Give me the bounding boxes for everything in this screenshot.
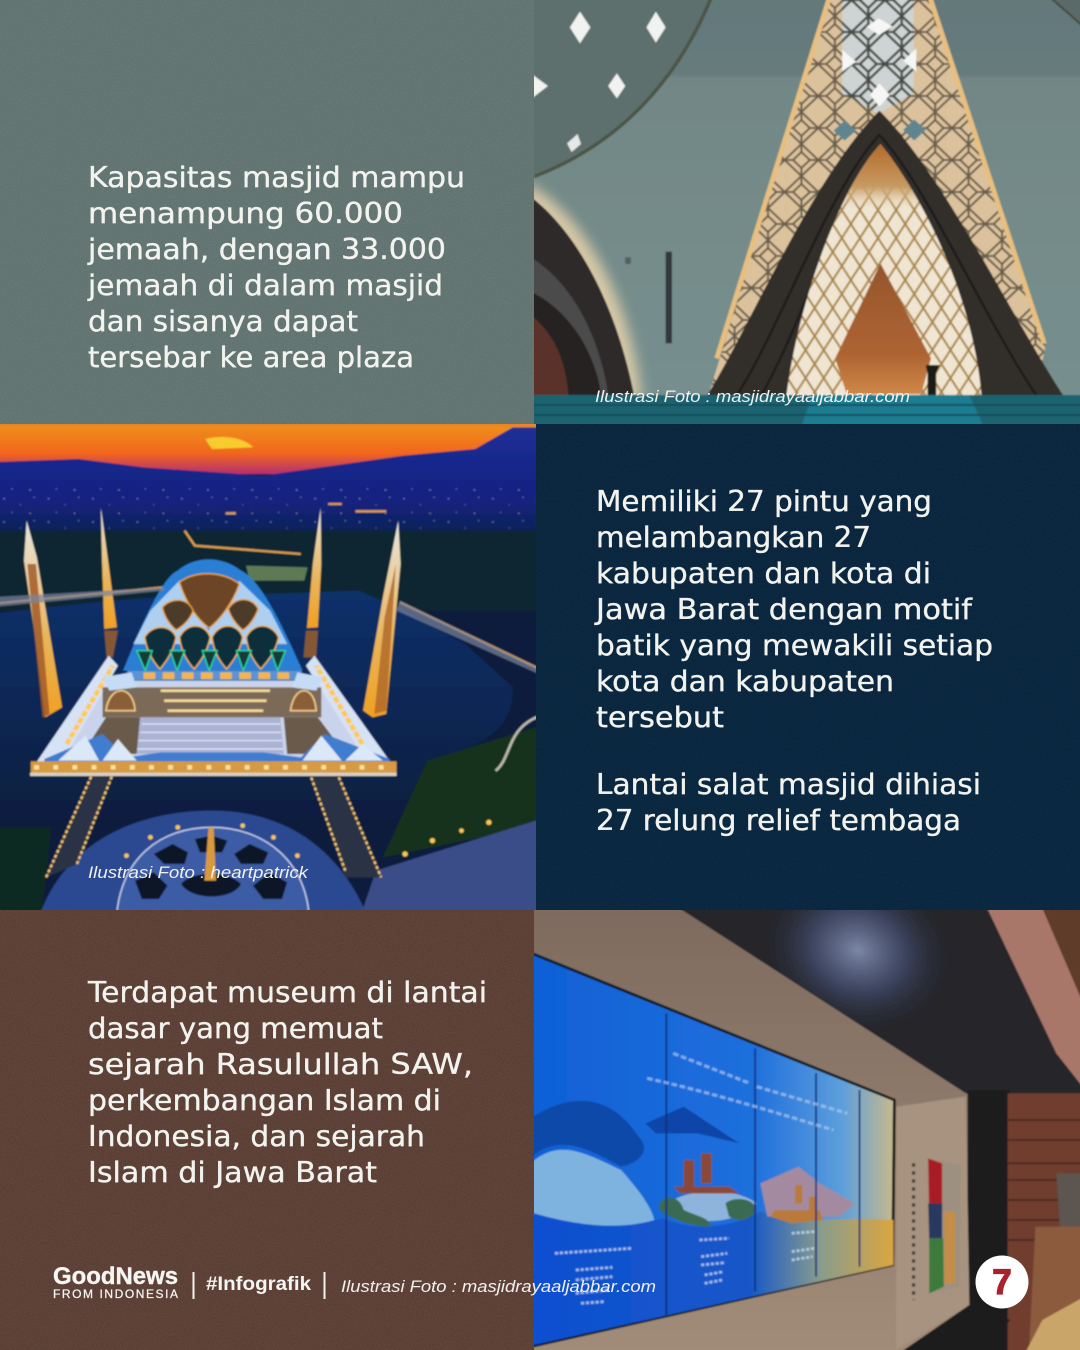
text: museum description: sejarah Rasulullah SAW, <box>88 1048 473 1081</box>
text: capacity of the mosque: tersebar ke area plaza <box>88 341 414 374</box>
page number badge: 7 <box>992 1263 1012 1302</box>
text: twenty-seven doors: Memiliki 27 pintu yang <box>596 485 932 518</box>
text: twenty-seven doors: 27 relung relief tembaga <box>596 804 961 837</box>
text: capacity of the mosque: Kapasitas masjid mampu <box>88 161 465 194</box>
text: capacity of the mosque: menampung 60.000 <box>88 197 403 230</box>
panel: museum text background <box>0 910 534 1350</box>
logo: GoodNews from Indonesia: GoodNews <box>53 1263 178 1290</box>
page number badge <box>976 1256 1028 1308</box>
text: twenty-seven doors <box>594 485 993 837</box>
text: twenty-seven doors: Lantai salat masjid dihiasi <box>596 768 981 801</box>
panel: capacity text background <box>0 0 534 424</box>
caption: aerial photo credit: Ilustrasi Foto : heartpatrick <box>88 863 310 882</box>
text: museum description: dasar yang memuat <box>88 1012 383 1045</box>
photo: aerial view of mosque at dusk <box>0 424 536 910</box>
text: museum description: Terdapat museum di lantai <box>87 976 487 1009</box>
text: museum description <box>87 976 487 1189</box>
caption: interior photo credit: Ilustrasi Foto : masjidrayaaljabbar.com <box>595 387 910 406</box>
hashtag: Infografik with dividers <box>192 1272 326 1299</box>
photo: museum video wall <box>534 910 1080 1350</box>
caption: museum photo credit: Ilustrasi Foto : masjidrayaaljabbar.com <box>341 1277 656 1296</box>
text: capacity of the mosque: dan sisanya dapat <box>88 305 358 338</box>
text: twenty-seven doors: Jawa Barat dengan motif <box>594 593 973 626</box>
photo: mosque interior mihrab <box>534 0 1080 424</box>
logo: GoodNews from Indonesia: FROM INDONESIA <box>53 1287 178 1301</box>
text: capacity of the mosque: jemaah di dalam masjid <box>87 269 443 302</box>
text: twenty-seven doors: kota dan kabupaten <box>596 665 894 698</box>
hashtag: Infografik with dividers: #Infografik <box>206 1274 311 1295</box>
text: twenty-seven doors: batik yang mewakili setiap <box>596 629 993 662</box>
text: twenty-seven doors: tersebut <box>596 701 724 734</box>
text: museum description: perkembangan Islam di <box>88 1084 441 1117</box>
text: twenty-seven doors: kabupaten dan kota di <box>596 557 931 590</box>
text: twenty-seven doors: melambangkan 27 <box>596 521 871 554</box>
panel: doors text background <box>536 424 1080 910</box>
text: capacity of the mosque: jemaah, dengan 33.000 <box>87 233 446 266</box>
text: capacity of the mosque <box>87 161 465 374</box>
text: museum description: Islam di Jawa Barat <box>88 1156 377 1189</box>
text: museum description: Indonesia, dan sejarah <box>88 1120 425 1153</box>
